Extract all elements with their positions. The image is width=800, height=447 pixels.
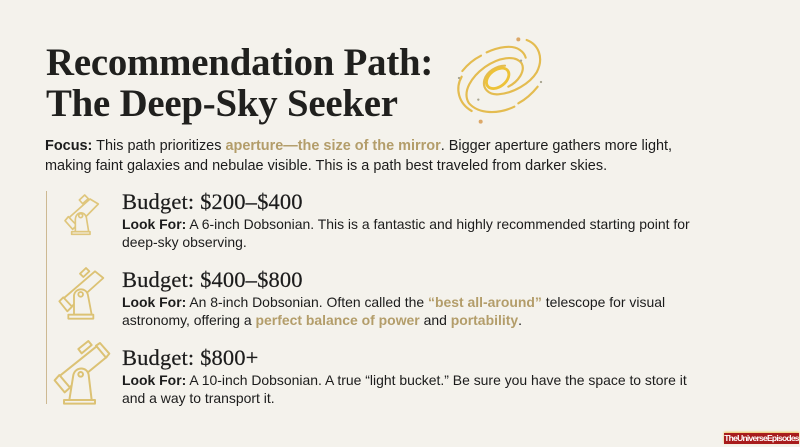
description 2: Look For: An 8-inch Dobsonian. Often called the “best all-around” telescope for visual (122, 294, 665, 310)
description 3: and a way to transport it. (122, 390, 275, 406)
title: The Deep-Sky Seeker (46, 82, 398, 124)
focus text block: Focus: This path prioritizes aperture—the size of the mirror. Bigger aperture gathers more light, (45, 138, 672, 154)
budget heading 2: Budget: $400–$800 (122, 267, 303, 292)
description 1 (122, 216, 690, 250)
icon: large telescope (54, 340, 110, 405)
description 3 (122, 372, 687, 406)
description 3: Look For: A 10-inch Dobsonian. A true “light bucket.” Be sure you have the space to store it (122, 372, 687, 388)
focus text block (45, 138, 672, 174)
icon: medium telescope (58, 267, 104, 320)
budget block 1 (122, 189, 690, 250)
description 2 (122, 294, 665, 328)
focus text block: making faint galaxies and nebulae visible. This is a path best traveled from darker skies. (45, 158, 607, 174)
budget heading 1: Budget: $200–$400 (122, 189, 303, 214)
description 1: Look For: A 6-inch Dobsonian. This is a fantastic and highly recommended starting point for (122, 216, 690, 232)
description 1: deep-sky observing. (122, 234, 247, 250)
title: Recommendation Path: (46, 41, 433, 84)
icon: small telescope (64, 194, 100, 236)
title (46, 41, 433, 124)
logo badge: TheUniverseEpisodes (724, 433, 799, 443)
budget heading 3: Budget: $800+ (122, 345, 259, 370)
icon: spiral galaxy (457, 37, 542, 124)
description 2: astronomy, offering a perfect balance of power and portability. (122, 312, 522, 328)
budget block 2 (122, 267, 665, 328)
budget block 3 (122, 345, 687, 406)
